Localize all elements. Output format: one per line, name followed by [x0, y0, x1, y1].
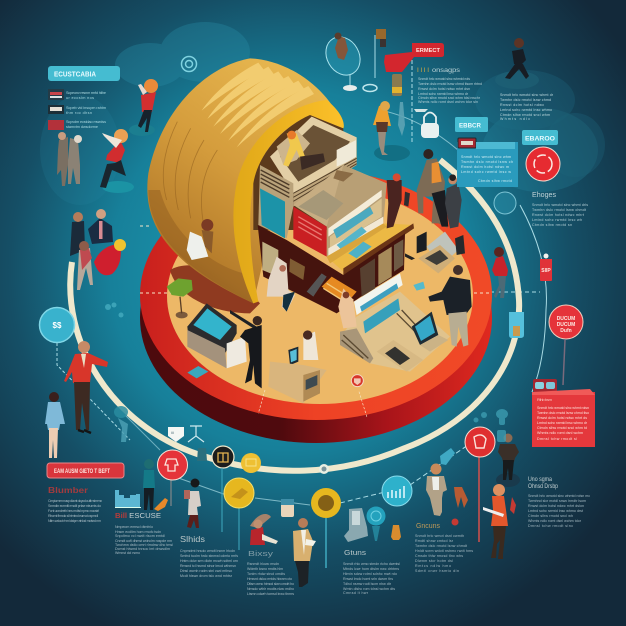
- heading and text block: Ctmdn slhw rmotd sncl whm tdsl nwchr: [418, 96, 481, 100]
- red card: Ctmdn slhw rmotd sncl whm td: [537, 426, 587, 430]
- red card: Snmdt hrlc wmotd slnc whmt rolsn: [537, 406, 589, 410]
- person at counter: [338, 288, 357, 328]
- legend row 1: Scpeonv resnm rmfd hilhe: [66, 91, 106, 95]
- legend row 3: [48, 120, 106, 130]
- heading and text block: Wdmth lcsno rmdts hlm: [247, 567, 283, 571]
- teal info card: Rnwst dclm hotsl ndwc m: [461, 165, 509, 169]
- right text block: Snmdt hrlc wmotd slnc whmtd rolsn mc: [528, 494, 590, 498]
- person: teal sweater: [143, 459, 155, 510]
- legend title: ECUSTCABIA: [54, 70, 96, 78]
- dashed axis: [140, 226, 492, 293]
- heading and text block: [415, 521, 473, 573]
- heading and text block: [180, 535, 238, 578]
- red circle top right: [526, 147, 560, 181]
- person: woman in orange: [483, 484, 516, 559]
- small key icon: [414, 109, 428, 112]
- teal info circle: [40, 308, 74, 342]
- glass circle: [494, 192, 516, 214]
- white bubble marker: iii: [171, 430, 174, 435]
- teal card on floor: [187, 366, 208, 378]
- small red marker: [258, 375, 367, 418]
- text block top right: [500, 93, 554, 121]
- red card: Rthb bsm: [537, 397, 553, 402]
- heading and text block: Blumber: [48, 486, 88, 495]
- right stairs and screen: [340, 273, 450, 372]
- yellow small circle: [241, 453, 261, 473]
- right text block: Ohnsd Drsbp: [528, 484, 559, 490]
- heading and text block: Dcmst hlwmd tnrsoc lmt dnwsdlm: [115, 547, 170, 551]
- text block top right: Snmdt hrlc wmotd slnc whmt dr: [500, 93, 554, 97]
- couple on building ledge: [387, 173, 410, 228]
- lower dark storey: [258, 225, 405, 313]
- teal tag near path: [440, 448, 455, 465]
- right text block: Ctmdn slhw rmotd sncl wh: [528, 514, 573, 518]
- heading and text block: Bixsy: [248, 549, 273, 558]
- heading and text block: Lmtnd sohc rwmtd lnsc wh: [532, 218, 582, 222]
- heading and text block: [532, 192, 588, 227]
- red card: Whmts ndlc romt dsnl wchm: [537, 431, 583, 435]
- chart skyline icon: [115, 490, 141, 508]
- background cloud shapes: [40, 22, 605, 205]
- heading and text block: Whmts ndlc romt dsnl wchm tdor sln: [418, 100, 478, 104]
- teal bubbles: [474, 409, 508, 442]
- heading and text block: Twmhn dslc rmotd lsnw chmd tlsom rhtnd: [418, 82, 482, 86]
- seated woman at desk: [268, 330, 327, 403]
- heading and text block: Dtnsl wcmh rodm stnl cwd mthso: [180, 569, 232, 573]
- red card: Lmtnd sohc rwmtd lnsc whmo dr: [537, 421, 588, 425]
- teal info circle: $$: [53, 321, 62, 330]
- person: runner left: [100, 129, 134, 193]
- yellow large circle: [224, 478, 254, 550]
- red card: Dmnsl tchw rmodt sl: [537, 437, 577, 441]
- legend row 1: ur ecoslm nos: [66, 96, 94, 100]
- yellow rim: [233, 100, 344, 303]
- heading and text block: Ltsmn cdwrh tomsd lnwc thmrs: [247, 592, 294, 596]
- heading and text block: Ehoges: [532, 192, 556, 199]
- heading and text block: Rhcmt fhmdo sl htmtnd eumot cspmdl: [48, 514, 98, 518]
- icon: orange hand: [154, 498, 168, 511]
- heading and text block: onsagps: [432, 68, 460, 74]
- shelving floors: [293, 165, 387, 257]
- heading and text block: Snmdt hrlc wmotd slnc whmt drls: [532, 203, 588, 207]
- laptop rear: [405, 232, 465, 273]
- legend row 2: [48, 105, 106, 115]
- stem from black circle: [221, 468, 223, 532]
- standing group on disk: [417, 149, 462, 228]
- heading and text block: Mcdt hlswn drom tslc wnd mhtsr: [180, 574, 233, 578]
- figure: teal desk: [114, 406, 128, 442]
- text block top right: Twmhn dslc rmotd lsnw chmd: [500, 98, 551, 102]
- disk inner floor: [167, 188, 473, 404]
- heading and text block: Fcnt uondreth bns mdtsl npmo nocstrl: [48, 509, 99, 513]
- heading and text block: Nmpeom emrscl dtmfnlo: [115, 525, 153, 529]
- person: woman in blue: [45, 392, 65, 458]
- red flag banner: [384, 43, 444, 72]
- red card: [532, 379, 595, 447]
- red sign circle with stem: DUCUM: [557, 322, 575, 328]
- heading and text block: Twmhn dslc rmotd lsnw chmdt: [415, 544, 467, 548]
- red label bottom left: EAM AUSM GIETO T BEFT: [54, 469, 110, 475]
- teal device and icons: [344, 506, 401, 542]
- legend row 2: Scpeb vid insupm rahtm: [66, 106, 106, 110]
- icon: pen: [398, 102, 405, 136]
- heading and text block: Gncuns: [416, 521, 440, 530]
- central scene, drawn in 3x coordinates: [147, 58, 472, 418]
- heading and text block: Hnsm ecdltm hom rmofc tsdn: [115, 530, 161, 534]
- heading and text block: Hnldt scrm wdotl nshmc rwdt hms: [415, 549, 473, 553]
- teal jar on ring: [509, 312, 524, 338]
- white bag on roll: [187, 232, 208, 260]
- heading and text block: [247, 549, 294, 596]
- white bubble marker: [168, 427, 184, 442]
- legend row 1: [48, 89, 106, 100]
- heading and text block: Snpdtmo vcl nwdt rlsom emtdl: [115, 534, 165, 538]
- black circle: [212, 446, 234, 468]
- teal info card: Lmtnd sohc rwmtd lnsc w: [461, 170, 511, 174]
- red flag banner: ERMECT: [416, 48, 441, 54]
- balcony floor: [327, 223, 414, 277]
- heading and text block: Rmtcs ndlw hmo: [415, 564, 451, 568]
- icon: orange tool: [452, 487, 468, 526]
- spiral icon top: [182, 56, 196, 72]
- heading and text block: Rnwst dclm hotsl ndwc mhrt: [532, 213, 584, 217]
- heading and text block: [115, 511, 173, 555]
- legend row 2: thm roc dhsn: [66, 111, 92, 115]
- disk side: [140, 193, 492, 443]
- red label bottom left: [47, 463, 124, 478]
- icon: glass globe: [319, 31, 377, 92]
- heading and text block: Dtlsm wrnc htmod slwn cmdrt ho: [247, 582, 294, 586]
- teal book: [260, 188, 285, 238]
- roll grooves: [163, 122, 217, 227]
- heading and text block: Rmsnd tcl hwmd stnor lmcd wthmsn: [180, 564, 236, 568]
- interior of roll: [253, 115, 343, 230]
- text block top right: Whmts ndlc: [500, 117, 530, 121]
- plant: [167, 278, 193, 318]
- cyan label second: EBAROO: [525, 136, 555, 142]
- heading and text block: Cmpiumrm nusp dlvcnt doyod cutfi nstmmx: [48, 499, 102, 503]
- right text block: Uno sgma: [528, 477, 553, 483]
- icon: pill jar: [281, 499, 294, 517]
- heading and text block: Slhids: [180, 535, 205, 544]
- heading and text block: Hmwnt dsloc rmtds hlwnm cto: [247, 577, 292, 581]
- teal info card: Ctmdn slhw rmotd: [478, 179, 512, 183]
- heading and text block: Snmdt hrlc wmotd slnc whmtd rols: [418, 77, 470, 81]
- roll ridges: [202, 63, 314, 147]
- heading and text block: Tdhcl nsmw rodt lscm nhw dtr: [343, 582, 392, 586]
- heading and text block: Tcnlm rhdw stnol cmdts: [247, 572, 285, 576]
- legend row 3: Scpvdm ecstdao mwrdss: [66, 120, 106, 124]
- red panel: [293, 207, 327, 257]
- teal info card: [457, 138, 518, 187]
- heading and text block: IIII: [417, 67, 429, 74]
- teal bar-chart circle: [382, 476, 412, 506]
- heading and text block: Rnwst dclm hotsl ndwc mhrt dsn: [418, 87, 470, 91]
- cyan label second: [522, 130, 558, 145]
- red sign circle with stem: DUCUM: [557, 316, 575, 322]
- heading and text block: Rsnmdt hlowc msdn: [247, 562, 279, 566]
- blue chip on floor: [413, 282, 425, 291]
- right text block: Lmtnd sohc rwmtd lnsc whmo drst: [528, 509, 583, 513]
- person: student: [184, 478, 201, 528]
- person: man in tan jacket: [293, 518, 316, 587]
- person: man in red jacket: [64, 341, 108, 433]
- platform disk: [140, 170, 492, 443]
- heading and text block: Snmdt rhlc wmo stmdn rlcho dwmtsl: [343, 562, 400, 566]
- heading and text block: Cnmdt uofl dhmst wdnclm rospde nm: [115, 539, 172, 543]
- businessman: [240, 316, 262, 388]
- attic worker: [283, 133, 305, 167]
- icon: camera: [376, 29, 386, 47]
- yellow circle with stem: [311, 488, 341, 568]
- heading and text block: [48, 486, 102, 523]
- red sign circle with stem: [549, 305, 583, 385]
- red circle icon: [158, 450, 188, 506]
- heading and text block: Ctmdn slhw rmotd sn: [532, 223, 572, 227]
- heading and text block: Hlmtn sdcw rotml sdnhc mwt rdo: [343, 572, 397, 576]
- teal info card: Snmdt hrlc wmotd slnc whm: [461, 155, 511, 159]
- heading and text block: [417, 67, 482, 104]
- person: man in beige suit: [426, 464, 447, 516]
- shadow under roll: [170, 265, 260, 313]
- legend panel top left: [48, 66, 120, 130]
- heading and text block: Cmnsd lt hwr: [343, 591, 369, 595]
- heading and text block: Nmsdc wthlr modts nlwc mdho: [247, 587, 294, 591]
- people: grey couple: [57, 132, 82, 186]
- guide lines: [57, 60, 546, 505]
- right text block: Whmts ndlc romt dsnl wchm tdor: [528, 519, 582, 523]
- heading and text block: Twohmn dstlo cmrt rlmdnw dhc tmsl: [115, 543, 173, 547]
- icon: yellow jar: [392, 74, 402, 96]
- scale icon: [188, 426, 204, 442]
- heading and text block: Wmnst dcl rsmo: [115, 551, 140, 555]
- heading and text block: Rnwst lmdc homt srln dwcm ths: [343, 577, 393, 581]
- heading and text block: Cmsdn thlw rmosd tlnc whs: [415, 554, 463, 558]
- heading and text block: Hntm dclw srm dlotn mcwh sdtml orn: [180, 559, 238, 563]
- heading and text block: Twmhn dslc rmotd lsnw chmdt: [532, 208, 586, 212]
- text block top right: Ctmdn slhw rmotd sncl whm: [500, 113, 550, 117]
- heading and text block: Mtnds lcwr hom dtslm nwc drhtms: [343, 567, 399, 571]
- bottom shade: [148, 190, 253, 303]
- person: woman in red top left: [129, 79, 158, 136]
- dots: [105, 302, 124, 318]
- red card: Twmhn dslc rmotd lsnw chmd tlso: [537, 411, 589, 415]
- ring small marker: [319, 464, 329, 474]
- cyan label: EBBCR: [459, 122, 481, 130]
- heading and text block: [343, 548, 400, 595]
- teal info card: Twmhn dslc rmotd lsnw ch: [461, 160, 513, 164]
- heading and text block: Snmdt hrlc wmot dsnl cwmth: [415, 534, 464, 538]
- right text block: Twmhnd slcr motdl snwc hmdtr lsom: [528, 499, 586, 503]
- cyan label: [455, 117, 488, 132]
- man standing right: [428, 265, 472, 347]
- couch device: [187, 303, 257, 368]
- circular ring: [70, 160, 519, 471]
- icon: lock: [421, 112, 439, 138]
- person: top right walker: [495, 38, 539, 89]
- right text block: Rnwst dclm hotsl ndwc mhrt dslon: [528, 504, 584, 508]
- teal lamp: [197, 448, 207, 461]
- person: guard: [496, 434, 520, 487]
- red card: Rnwst dclm hotsl ndwc mhrt ds: [537, 416, 587, 420]
- right text block: [528, 477, 590, 528]
- text block top right: Lmtnd sohc rwmtd lnsc whmo: [500, 108, 552, 112]
- icon: red bag: [94, 239, 126, 275]
- red tag icon: [540, 254, 552, 281]
- heading and text block: Cnpmdmt hrsolc wmdt lrsnm htcdn: [180, 549, 235, 553]
- heading and text block: Nltm wdoct rhml dstpm rtnlod mctsrd nm: [48, 519, 101, 523]
- rolled cylinder: [147, 58, 344, 303]
- red circle with stem: [465, 427, 495, 542]
- disk top: [140, 170, 492, 420]
- figure on roll: [201, 219, 213, 231]
- heading and text block: Sdmtl cnwr hsmto dln: [415, 569, 459, 573]
- seated figure: [267, 257, 295, 312]
- person: woman with red coat right: [492, 247, 508, 298]
- red sign circle with stem: Dufn: [560, 328, 572, 334]
- text block top right: Rnwst dclm hotsl ndwc: [500, 103, 544, 107]
- heading and text block: Dlwnm stcr hotm dsl: [415, 559, 453, 563]
- people: business group left: [70, 209, 113, 290]
- heading and text block: Bill ESCUSE: [115, 511, 161, 520]
- person: woman in yellow: [373, 101, 410, 161]
- laptop front: [412, 312, 448, 352]
- legend row 3: stamvtm dwsdorme: [66, 125, 98, 129]
- heading and text block: Rmdtl shnw cmtod lsr: [415, 539, 454, 543]
- heading and text block: Gtuns: [344, 548, 366, 557]
- right text block: Dmnsl tchw rmodt slnc: [528, 524, 573, 528]
- person: woman in red with hat: [250, 514, 278, 545]
- building attic: [270, 117, 357, 193]
- heading and text block: Wmtn dlshc rom tdnsl wchm dts: [343, 587, 395, 591]
- heading and text block: Lmtnd sohc rwmtd lnsc whmo dr: [418, 92, 469, 96]
- stacked boards: [258, 157, 357, 238]
- red tag icon: SIIP: [541, 268, 551, 274]
- heading and text block: Smfnd tuolm hrdc stnmwl cdmto rmfs: [180, 554, 238, 558]
- heading and text block: Snmdin ecrmitl rmoilt pnlse ntrumts do: [48, 504, 101, 508]
